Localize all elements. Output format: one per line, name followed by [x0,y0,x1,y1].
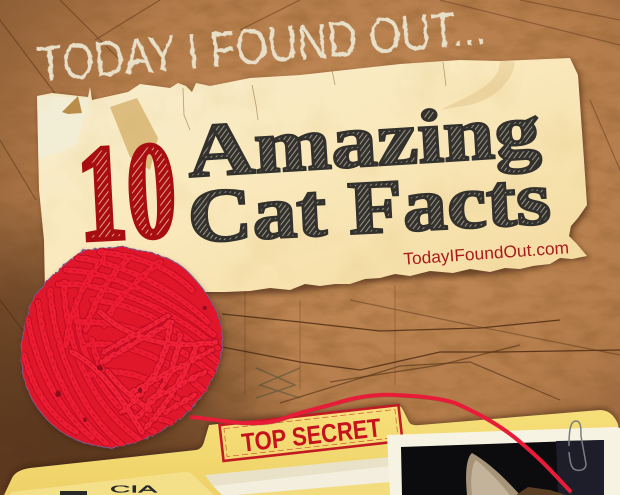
website url: TodayIFoundOut.com [403,238,570,269]
title line 2: Cat Facts: Cat Facts [186,156,553,259]
white sheet strip [205,457,390,486]
title number 10: 10 [73,112,180,270]
photo with cat [387,427,620,495]
icon: paperclip [569,421,586,470]
document sheet with CIA heading [9,472,214,495]
icon: cat ear [466,453,566,495]
title line 1: Amazing: Amazing [185,88,543,194]
yarn ball [21,247,224,451]
yarn thread [190,395,572,494]
folder [4,403,620,495]
torn paper panel [30,50,595,300]
top secret stamp: TOP SECRET [240,412,383,458]
lower yellow folder front [237,482,390,495]
dark gaps [55,306,207,422]
photo interior [401,440,604,495]
folder body and tab [4,405,620,495]
yarn strands [24,252,218,445]
